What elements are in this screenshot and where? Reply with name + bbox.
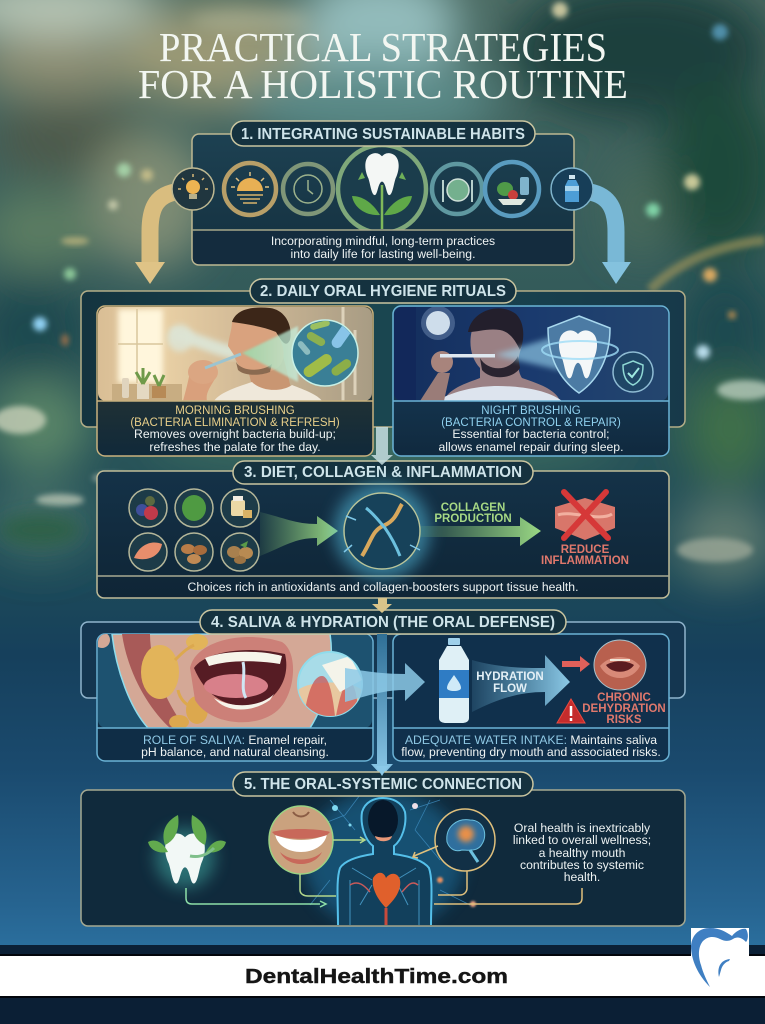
icon: brain — [435, 809, 495, 871]
arrow: hydration flow — [472, 655, 570, 712]
icon: smile — [269, 806, 333, 874]
footer: website banner: DentalHealthTime.com — [245, 966, 508, 988]
label: collagen production: COLLAGEN — [441, 502, 505, 514]
card: morning brushing — [97, 306, 373, 456]
footer: dark band — [0, 945, 765, 1024]
card: role of saliva — [94, 632, 373, 761]
label: chronic dehydration risks — [582, 692, 666, 726]
text: water intake: ADEQUATE WATER INTAKE: Maintains saliva — [405, 733, 657, 747]
heading: section 1 — [231, 121, 535, 146]
icon: berries — [129, 489, 167, 527]
arrow: saliva to hydration — [345, 663, 425, 702]
text: role of saliva — [141, 733, 329, 759]
heading: section 1: 1. INTEGRATING SUSTAINABLE HABITS — [241, 126, 525, 143]
label: reduce inflammation: REDUCE — [561, 544, 610, 556]
label: hydration flow — [476, 671, 544, 695]
card: night brushing — [393, 306, 669, 456]
text: night: (BACTERIA CONTROL & REPAIR) — [441, 417, 621, 429]
arrow: section 2 to 3 — [371, 427, 393, 465]
icon: light bulb — [172, 168, 214, 210]
text: oral health statement: linked to overall wellness; — [513, 833, 651, 847]
caption bar: habits: into daily life for lasting well-being. — [291, 247, 475, 261]
text: morning: MORNING BRUSHING — [175, 405, 295, 417]
caption bar: habits — [192, 230, 574, 264]
text: oral health statement: Oral health is inextricably — [514, 821, 651, 835]
icon: human body with heart — [338, 798, 432, 926]
connector: smile arrow — [333, 837, 365, 843]
text: water intake — [401, 733, 661, 759]
arrow tip: section 4 to 5 — [376, 766, 388, 776]
network glow around body — [304, 790, 476, 930]
icon: warning triangle — [557, 699, 585, 723]
arrow: gold curved left — [135, 192, 175, 284]
panel: 2 daily oral hygiene rituals — [81, 279, 685, 456]
icon: tooth with sprout — [352, 153, 412, 229]
icon: spinach — [175, 489, 213, 527]
text: oral health statement: contributes to systemic — [520, 858, 644, 872]
text: morning: (BACTERIA ELIMINATION & REFRESH) — [130, 417, 340, 429]
arrow: blue curved right — [590, 192, 631, 284]
label: chronic dehydration risks: CHRONIC — [597, 692, 651, 704]
text: night — [439, 405, 623, 454]
icon: food and bottle — [497, 177, 529, 205]
illustration: mouth and saliva glands — [94, 632, 372, 729]
arrow: collagen production — [420, 517, 541, 546]
text: oral health statement — [513, 821, 651, 884]
connector: text to body — [434, 888, 582, 904]
icon: almonds — [175, 533, 213, 571]
icon: tooth with leaves — [148, 815, 226, 888]
arrow: section 4 to 5 vertical flow — [371, 634, 393, 776]
illustration: morning bathroom scene — [98, 307, 372, 401]
caption: diet: Choices rich in antioxidants and collagen-boosters support tissue health. — [188, 580, 578, 594]
label: hydration flow: HYDRATION — [476, 671, 544, 683]
connector: tooth to body — [186, 888, 326, 907]
text: water intake: flow, preventing dry mouth and associated risks. — [401, 745, 661, 759]
heading: section 3: 3. DIET, COLLAGEN & INFLAMMATION — [244, 464, 522, 481]
icon chain: sun, clock, tooth, plate, food — [224, 145, 539, 233]
icon: water bottle — [439, 638, 469, 723]
heading: section 4 — [200, 610, 566, 634]
icon: sun — [231, 172, 269, 203]
label: chronic dehydration risks: RISKS — [606, 714, 642, 726]
icon: dry mouth — [594, 640, 646, 690]
label: collagen production: PRODUCTION — [434, 513, 512, 525]
text: night: allows enamel repair during sleep. — [439, 440, 623, 454]
title: FOR A HOLISTIC ROUTINE — [138, 61, 628, 107]
title: PRACTICAL STRATEGIES — [159, 24, 607, 70]
arrow: foods to collagen — [260, 512, 338, 556]
text: oral health statement: a healthy mouth — [539, 846, 625, 860]
arrow: section 3 to 4 — [372, 598, 392, 613]
icon: plate — [443, 179, 472, 202]
inset: tooth enamel repair — [298, 652, 362, 716]
icon: walnuts — [221, 533, 259, 571]
footer: website banner — [0, 956, 765, 996]
icon: reduce inflammation — [555, 492, 615, 540]
text: morning: refreshes the palate for the day. — [149, 440, 321, 454]
illustration: night scene — [394, 306, 668, 401]
text: night: Essential for bacteria control; — [452, 427, 610, 441]
card: adequate water intake — [393, 634, 669, 761]
text: oral health statement: health. — [564, 870, 600, 884]
text: night: NIGHT BRUSHING — [481, 405, 581, 417]
panel: 3 diet, collagen and inflammation — [97, 461, 669, 598]
label: reduce inflammation — [541, 544, 629, 567]
icon: salmon — [129, 533, 167, 571]
text: role of saliva: pH balance, and natural cleansing. — [141, 745, 329, 759]
icon: DNA — [334, 483, 430, 579]
heading: section 5: 5. THE ORAL-SYSTEMIC CONNECTION — [244, 776, 522, 793]
logo: tooth — [691, 928, 749, 987]
food icons — [129, 489, 259, 571]
panel: 4 saliva and hydration — [81, 610, 685, 761]
label: collagen production — [434, 502, 512, 525]
heading: section 2 — [250, 279, 516, 303]
text: role of saliva: ROLE OF SALIVA: Enamel repair, — [143, 733, 327, 747]
arrow: to dry mouth — [562, 656, 590, 672]
panel: 1 integrating sustainable habits — [172, 121, 593, 265]
heading: section 5 — [233, 772, 533, 796]
connector: smile to body — [300, 874, 336, 896]
label: hydration flow: FLOW — [493, 683, 527, 695]
steam — [172, 335, 236, 353]
icon: clock — [294, 175, 322, 203]
heading: section 4: 4. SALIVA & HYDRATION (THE ORAL DEFENSE) — [211, 614, 555, 631]
connector: brain down — [438, 871, 467, 895]
icon: water bottle — [551, 168, 593, 210]
panel: 5 the oral-systemic connection — [81, 772, 685, 930]
text: morning — [130, 405, 340, 454]
connector: brain to body — [413, 846, 438, 858]
label: chronic dehydration risks: DEHYDRATION — [582, 703, 666, 715]
heading: section 2: 2. DAILY ORAL HYGIENE RITUALS — [260, 283, 506, 300]
caption bar: habits: Incorporating mindful, long-term practices — [271, 234, 495, 248]
text: morning: Removes overnight bacteria build-up; — [134, 427, 336, 441]
icon: supplements — [221, 489, 259, 527]
title — [138, 24, 628, 107]
label: reduce inflammation: INFLAMMATION — [541, 555, 629, 567]
